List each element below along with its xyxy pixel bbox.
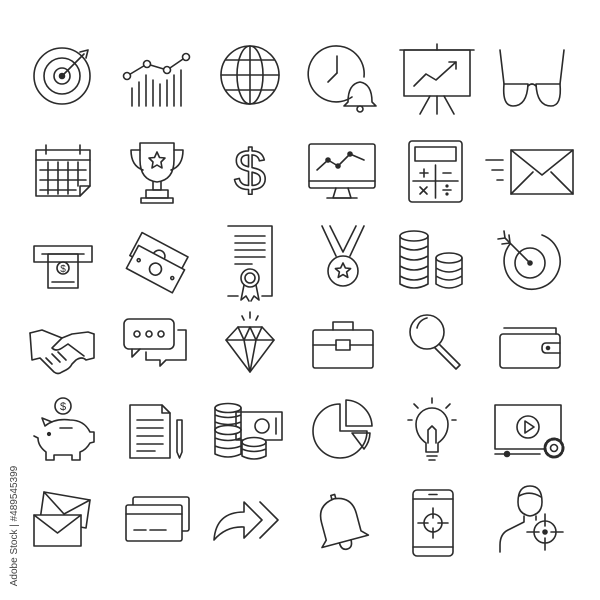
stock id text: Adobe Stock | #489545399 (9, 465, 20, 586)
icon: chat bubbles (124, 319, 186, 366)
icon: magnifier (410, 315, 460, 369)
icon: ATM: $ (60, 264, 66, 275)
icon: person with crosshair (500, 486, 563, 552)
icon: video player with gear (495, 405, 563, 457)
icon: credit cards (126, 497, 189, 541)
icon: money bills (124, 233, 191, 293)
icon: envelope with speed lines (486, 150, 573, 194)
icon: medal (322, 226, 364, 286)
icon: dollar sign: $ (234, 138, 266, 203)
icon: diamond (226, 312, 274, 372)
icon: piggy bank (34, 398, 94, 460)
icon: presentation board (400, 44, 474, 114)
icon: clock with bell (308, 46, 376, 112)
icon: line chart with bars (124, 54, 190, 106)
icon: target with arrow (498, 231, 560, 289)
icon: document with pencil (130, 405, 182, 458)
icon: envelopes (34, 492, 90, 546)
icon: briefcase (313, 322, 373, 368)
icon: target (34, 48, 90, 104)
icon: coins and bill (215, 404, 282, 459)
icon: phone with crosshair (413, 490, 453, 556)
icon: certificate (228, 226, 272, 301)
icon: glasses (500, 50, 564, 106)
icon: trophy (131, 143, 183, 203)
icon: pie chart (313, 400, 372, 458)
icon: bell (310, 489, 370, 555)
icon: ATM (34, 246, 92, 288)
icon: handshake (30, 330, 94, 374)
icon: lightbulb (408, 398, 456, 460)
icon: monitor chart (309, 144, 375, 198)
icon: share arrows (214, 502, 278, 540)
icon: globe (221, 46, 279, 104)
icon: piggy bank: $ (60, 401, 66, 413)
icon: coin stacks (400, 231, 462, 288)
icon: calendar (36, 145, 90, 196)
icon: calculator (409, 141, 462, 202)
icon: wallet (500, 328, 560, 368)
